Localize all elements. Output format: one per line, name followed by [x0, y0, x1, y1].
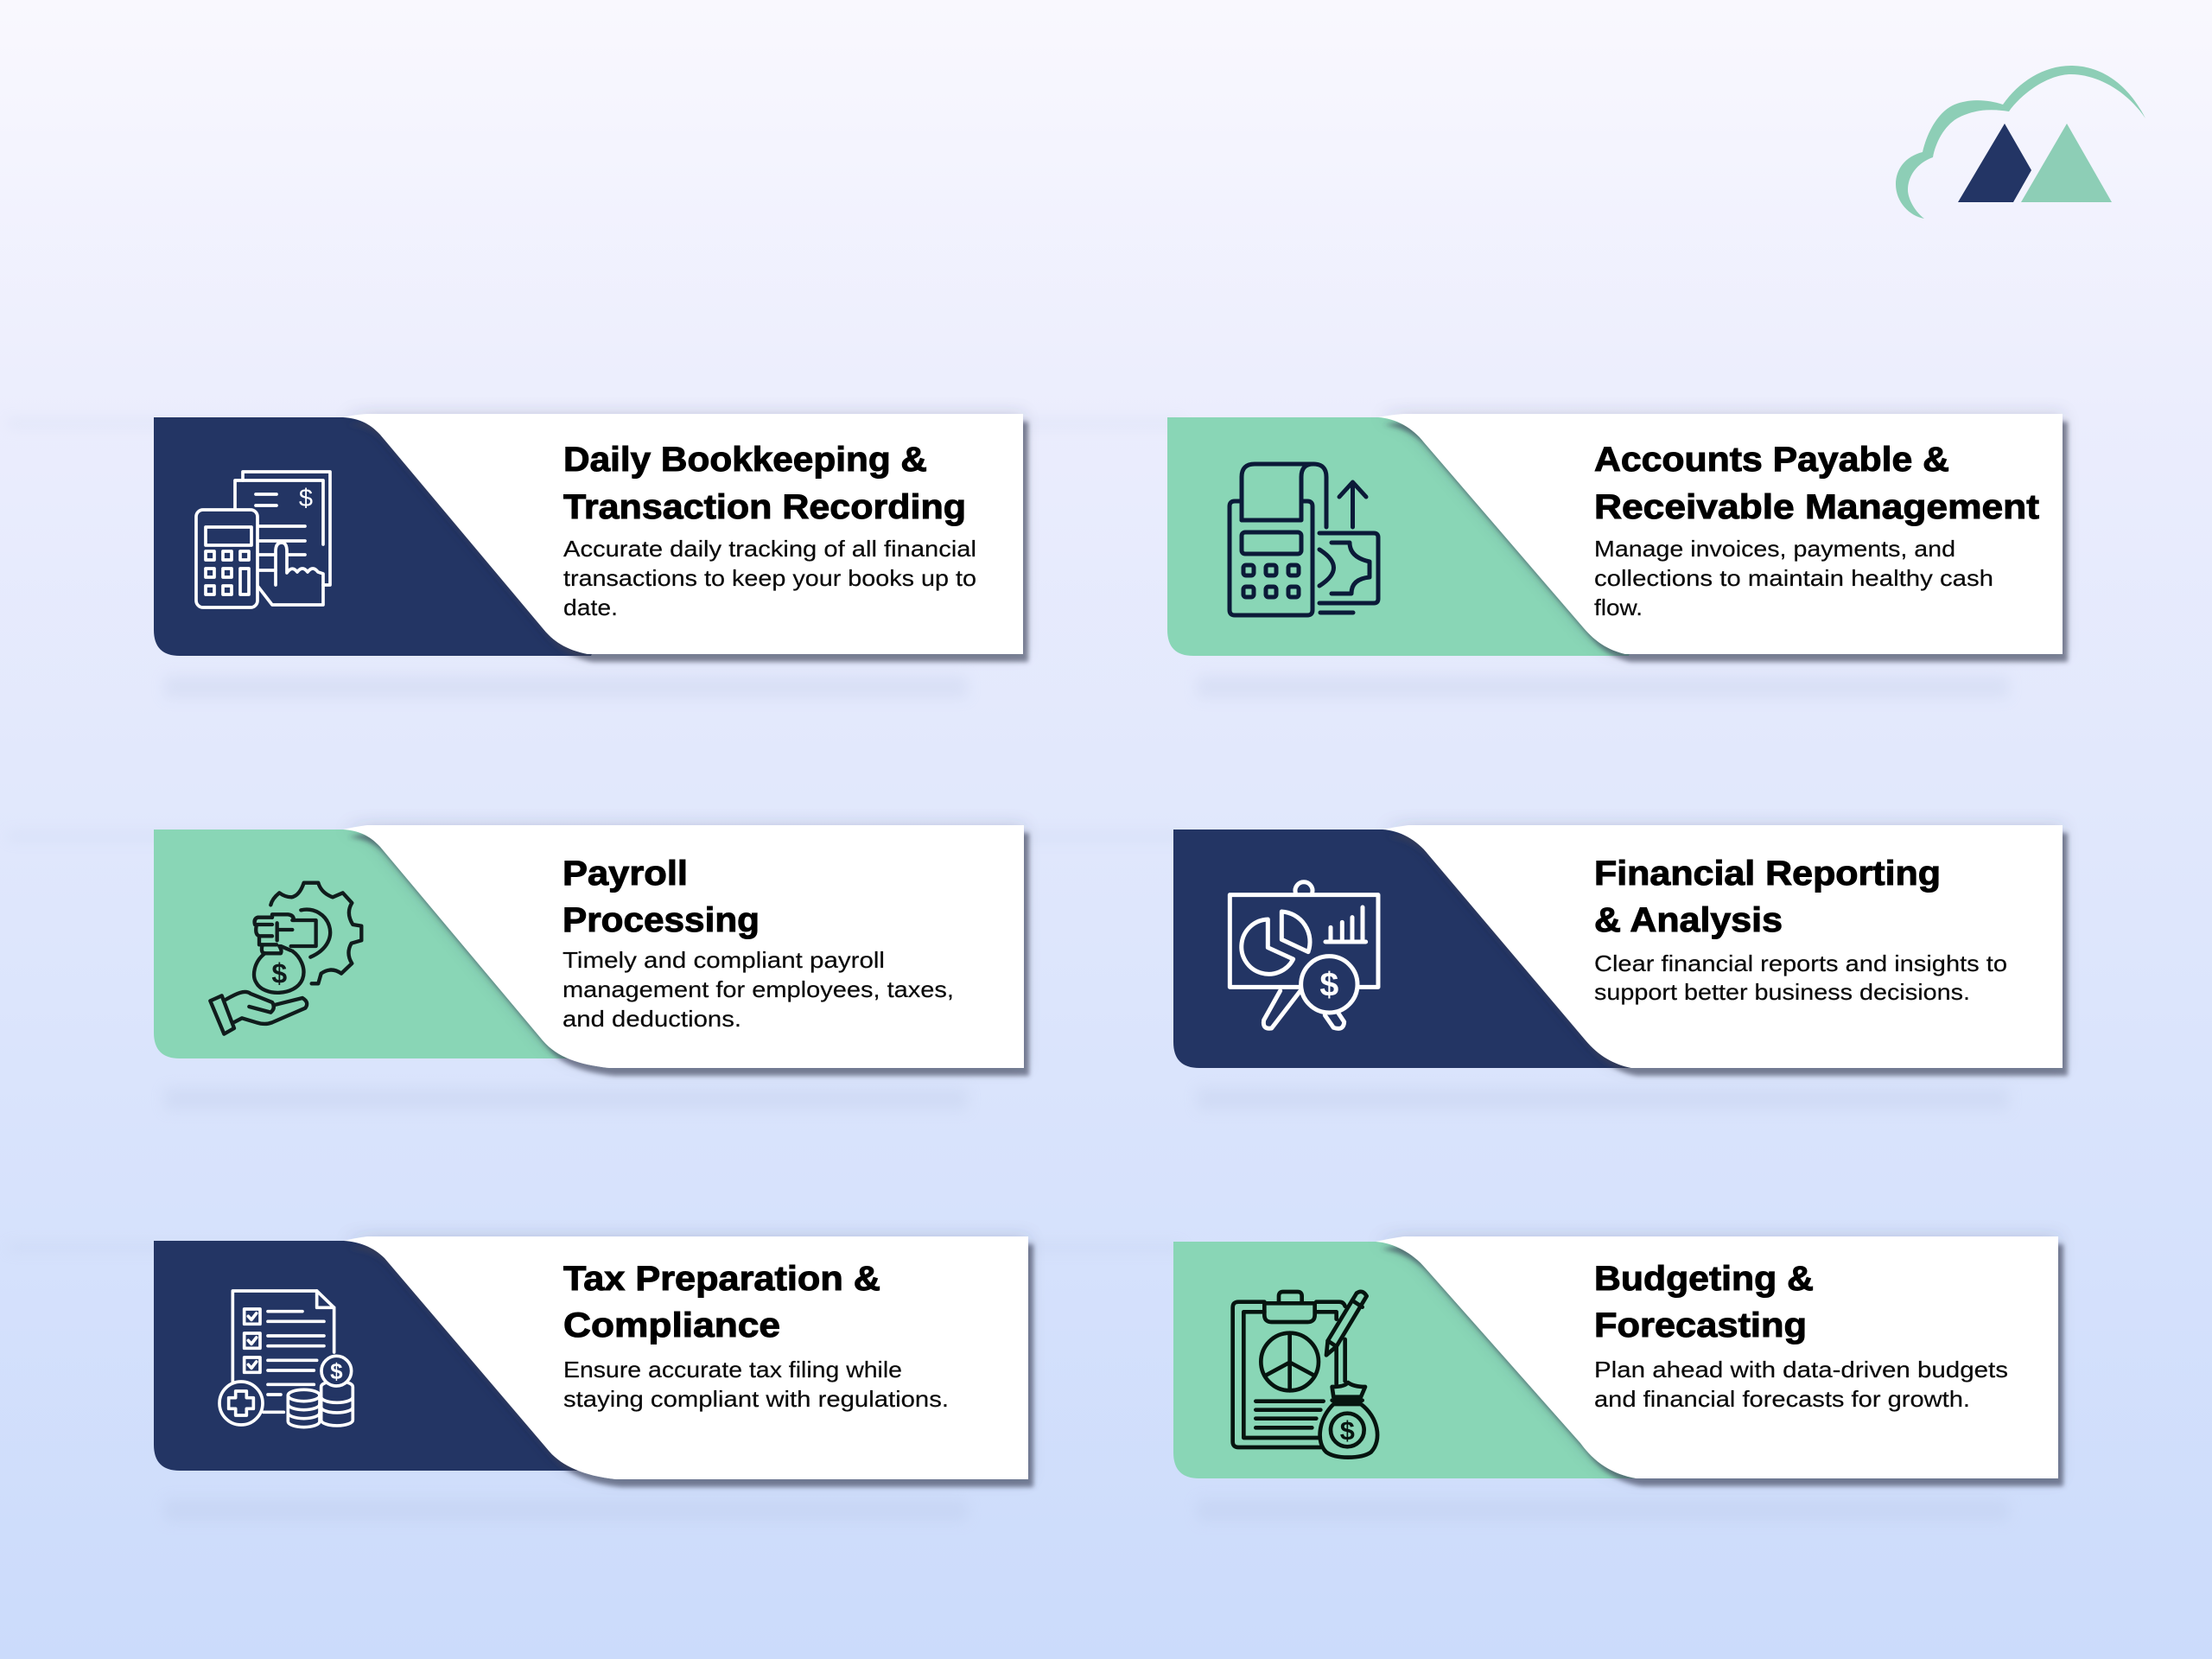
description: support better business decisions.	[1594, 979, 1970, 1005]
description: Manage invoices, payments, and	[1594, 536, 1955, 562]
description: Timely and compliant payroll	[563, 947, 885, 973]
white panel	[344, 1236, 1028, 1479]
faint background bands	[7, 420, 2009, 1522]
icon: presentation board with magnifier	[1230, 882, 1378, 1028]
icon: payment terminal	[1230, 464, 1378, 615]
icon: hand, money bag and gear: $	[271, 957, 287, 988]
icon: calculator and invoice	[196, 472, 330, 607]
colour panel	[1167, 417, 1633, 656]
description	[563, 1357, 949, 1412]
heading: Budgeting &	[1594, 1260, 1814, 1298]
heading: Transaction Recording	[563, 488, 966, 526]
white panel	[1376, 1236, 2058, 1478]
heading: Daily Bookkeeping &	[563, 441, 927, 479]
description	[1594, 950, 2007, 1005]
card: Financial Reporting	[1173, 825, 2063, 1068]
heading	[563, 441, 966, 526]
heading: Forecasting	[1594, 1306, 1807, 1344]
description	[1594, 536, 1993, 620]
card: Payroll Processing	[154, 825, 1024, 1068]
heading	[1594, 855, 1941, 939]
description: Ensure accurate tax filing while	[563, 1357, 902, 1382]
description	[1594, 1357, 2008, 1412]
card: Daily Bookkeeping	[154, 414, 1023, 656]
description: Clear financial reports and insights to	[1594, 950, 2007, 976]
heading	[563, 1260, 880, 1344]
icon: calculator and invoice: $	[299, 485, 313, 512]
icon: tax document and coins	[219, 1291, 353, 1427]
icon: hand, money bag and gear	[210, 883, 361, 1034]
logo	[1896, 66, 2145, 219]
heading	[1594, 441, 2039, 526]
white panel	[1382, 825, 2063, 1068]
description: collections to maintain healthy cash	[1594, 565, 1993, 591]
icon: clipboard with chart, pencil and money bag: $	[1340, 1416, 1355, 1446]
description: and deductions.	[563, 1006, 741, 1032]
description: flow.	[1594, 594, 1643, 620]
heading: & Analysis	[1594, 901, 1783, 939]
heading: Financial Reporting	[1594, 855, 1941, 893]
heading	[1594, 1260, 1814, 1344]
colour panel	[154, 417, 596, 656]
icon: presentation board with magnifier: $	[1319, 966, 1338, 1004]
colour panel	[154, 830, 605, 1058]
heading: Accounts Payable &	[1594, 441, 1949, 479]
description: Accurate daily tracking of all financial	[563, 536, 976, 562]
card: Accounts Payable and Receivable	[1167, 414, 2063, 656]
icon: tax document and coins: $	[330, 1358, 343, 1384]
heading: Processing	[563, 901, 760, 939]
white panel	[1378, 414, 2063, 654]
description: transactions to keep your books up to	[563, 565, 976, 591]
icon: clipboard with chart, pencil and money bag	[1233, 1292, 1377, 1458]
white panel	[343, 414, 1023, 654]
colour panel	[1173, 1242, 1642, 1478]
description	[563, 947, 954, 1032]
description	[563, 536, 976, 620]
description: Plan ahead with data-driven budgets	[1594, 1357, 2008, 1382]
heading	[563, 855, 760, 939]
description: and financial forecasts for growth.	[1594, 1386, 1970, 1412]
colour panel	[1173, 830, 1642, 1068]
white panel	[343, 825, 1024, 1068]
description: staying compliant with regulations.	[563, 1386, 949, 1412]
heading: Payroll	[563, 855, 688, 893]
heading: Tax Preparation &	[563, 1260, 880, 1298]
heading: Receivable Management	[1594, 488, 2039, 526]
description: management for employees, taxes,	[563, 976, 954, 1002]
heading: Compliance	[563, 1306, 780, 1344]
card: Tax Preparation	[154, 1236, 1028, 1479]
description: date.	[563, 594, 618, 620]
card: Budgeting and Forecasting	[1173, 1236, 2058, 1478]
colour panel	[154, 1241, 605, 1471]
